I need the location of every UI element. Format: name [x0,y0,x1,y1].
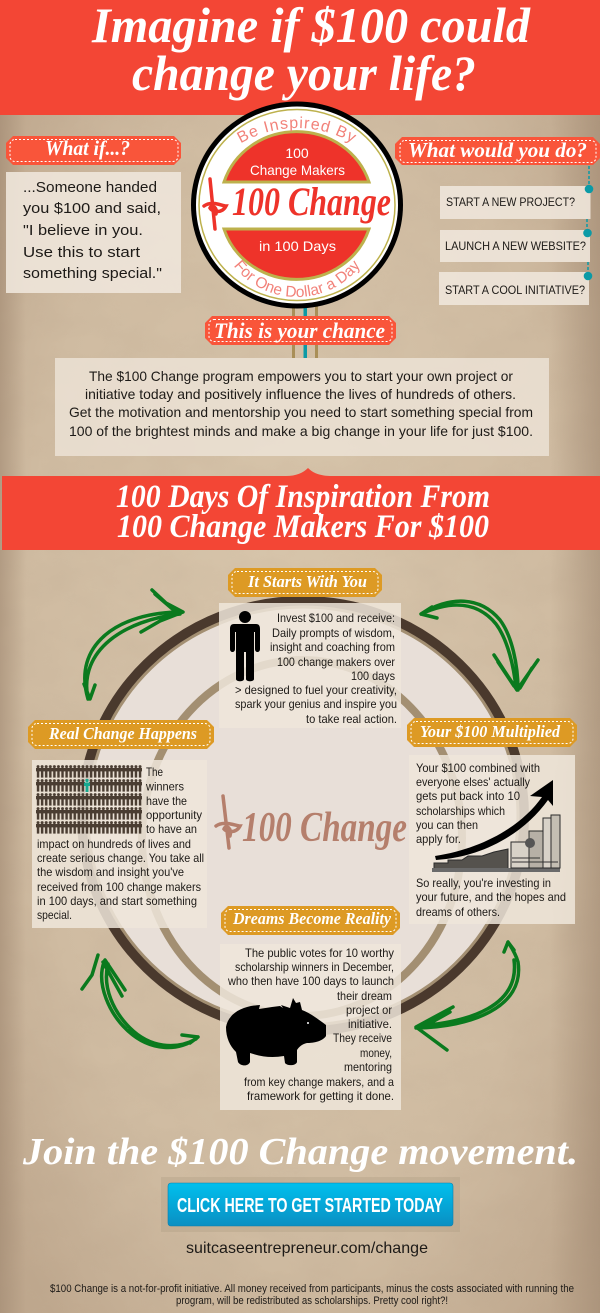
badge: 100 Change logo [191,102,403,308]
text box: gets put back into 10 [416,789,520,803]
program description text box: 100 of the brightest minds and make a big change in your life for just $100. [69,423,533,439]
tag: What would you do: What would you do? [408,138,587,162]
center logo: 100 Change: 100 Change [242,805,407,851]
program description text box: The $100 Change program empowers you to start your own project or [89,368,513,384]
panel: Your $100 Multiplied [407,718,577,924]
arrow: top right [421,601,538,690]
text box [409,755,575,924]
title banner [0,0,600,115]
text box: They receive [333,1031,392,1045]
arrow: top left [84,590,183,699]
text box: to take real action. [306,712,397,726]
text box: someone handed you $100: something special." [23,265,162,282]
arrow: bottom left [82,955,198,1047]
text box: Invest $100 and receive: [277,611,395,625]
text box: special. [37,908,72,922]
tag: Dreams Become Reality [232,909,391,928]
text box: Daily prompts of wisdom, [272,626,395,640]
tag [28,720,214,749]
text box: someone handed you $100: ...Someone handed [23,179,157,196]
section banner: 100 days of inspiration: 100 Change Makers For $100 [117,509,489,545]
arrow: bottom right [416,942,519,1050]
text box: received from 100 change makers [37,880,201,894]
text box: their dream [337,989,392,1003]
question list: LAUNCH A NEW WEBSITE? [445,239,586,253]
text box: insight and coaching from [270,640,395,654]
text box: The public votes for 10 worthy [245,946,394,960]
text box: framework for getting it done. [247,1089,394,1103]
text box: apply for. [416,832,461,846]
text box: > designed to fuel your creativity, [235,683,397,697]
tag: This is your chance: This is your chance [214,318,385,343]
text box: the wisdom and insight you've [37,865,184,879]
text box: from key change makers, and a [244,1075,394,1089]
text box: The [146,765,163,779]
section banner: 100 days of inspiration: 100 Days Of Inspiration From [116,479,490,515]
url: suitcaseentrepreneur.com/change [186,1240,428,1257]
tag: What if: What if...? [45,136,130,160]
tag [407,718,577,747]
footer note [50,1283,574,1307]
text box: winners [145,780,184,794]
text box [32,760,207,928]
button [161,1177,460,1232]
text box: scholarships which [416,804,505,818]
text box: you can then [416,818,478,832]
text box: someone handed you $100: you $100 and said, [23,200,161,217]
question list [439,166,593,305]
tag [221,906,400,935]
text box: your future, and the hopes and [416,890,566,904]
text box: 100 days [351,669,395,683]
badge: 100 Change logo: Change Makers [250,162,345,178]
panel: It Starts With You [219,568,401,728]
program description text box: Get the motivation and mentorship you need to start something special from [69,404,533,420]
connector poles under badge [292,306,318,358]
text box [219,603,401,728]
tag: It Starts With You [247,572,367,591]
text box: impact on hundreds of lives and [37,837,191,851]
tag: Real Change Happens [48,724,197,743]
tag: Your $100 Multiplied [420,722,560,741]
text box: in 100 days, and start something [37,894,197,908]
title banner: change your life? [132,45,476,101]
badge: 100 Change logo: Be Inspired By [236,116,356,143]
icon: piggy bank [226,998,326,1065]
button: CLICK HERE TO GET STARTED TODAY [177,1195,443,1217]
icon: person [230,611,260,681]
text box: money, [360,1046,392,1060]
text box: 100 change makers over [277,655,395,669]
text box: scholarship winners in December, [235,960,394,974]
text box: So really, you're investing in [416,876,551,890]
text box: someone handed you $100: "I believe in you. [23,222,143,239]
text box: dreams of others. [416,905,500,919]
text box: opportunity [146,808,202,822]
footer note: program, will be redistributed as scholarships. Pretty cool right?! [176,1295,448,1307]
program description text box [55,358,549,456]
panel: Dreams Become Reality [220,906,401,1110]
question list: START A NEW PROJECT? [446,195,575,209]
text box: have the [146,794,187,808]
text box [220,944,401,1110]
text box: create serious change. You take all [37,851,204,865]
text box: Your $100 combined with [416,761,540,775]
badge: 100 Change logo: 100 [285,145,309,161]
program description text box: initiative today and positively influence the lives of hundreds of others. [85,386,516,402]
badge: 100 Change logo: For One Dollar a Day [234,260,360,298]
text box: everyone elses' actually [416,775,530,789]
icon: crowd of people [36,765,142,835]
badge: 100 Change logo: in 100 Days [259,238,336,254]
text box: mentoring [344,1060,392,1074]
icon: growth arrow [435,780,553,860]
text box: project or [346,1003,392,1017]
text box: spark your genius and inspire you [235,697,397,711]
text box: someone handed you $100 [6,172,181,293]
cycle rings [82,601,524,1031]
tag: What if [6,136,181,165]
section banner: 100 days of inspiration [2,468,600,550]
center logo: 100 Change [216,796,407,851]
text box: to have an [146,822,197,836]
text box: who then have 100 days to launch [227,974,394,988]
icon: rising money stacks [432,815,560,872]
question list: START A COOL INITIATIVE? [445,283,585,297]
text box: someone handed you $100: Use this to start [23,244,141,261]
panel: Real Change Happens [28,720,214,928]
badge: 100 Change logo: 100 Change [232,179,391,224]
text box: initiative. [348,1017,392,1031]
tag [228,568,382,597]
call to action heading: Join the $100 Change movement. [22,1131,578,1173]
